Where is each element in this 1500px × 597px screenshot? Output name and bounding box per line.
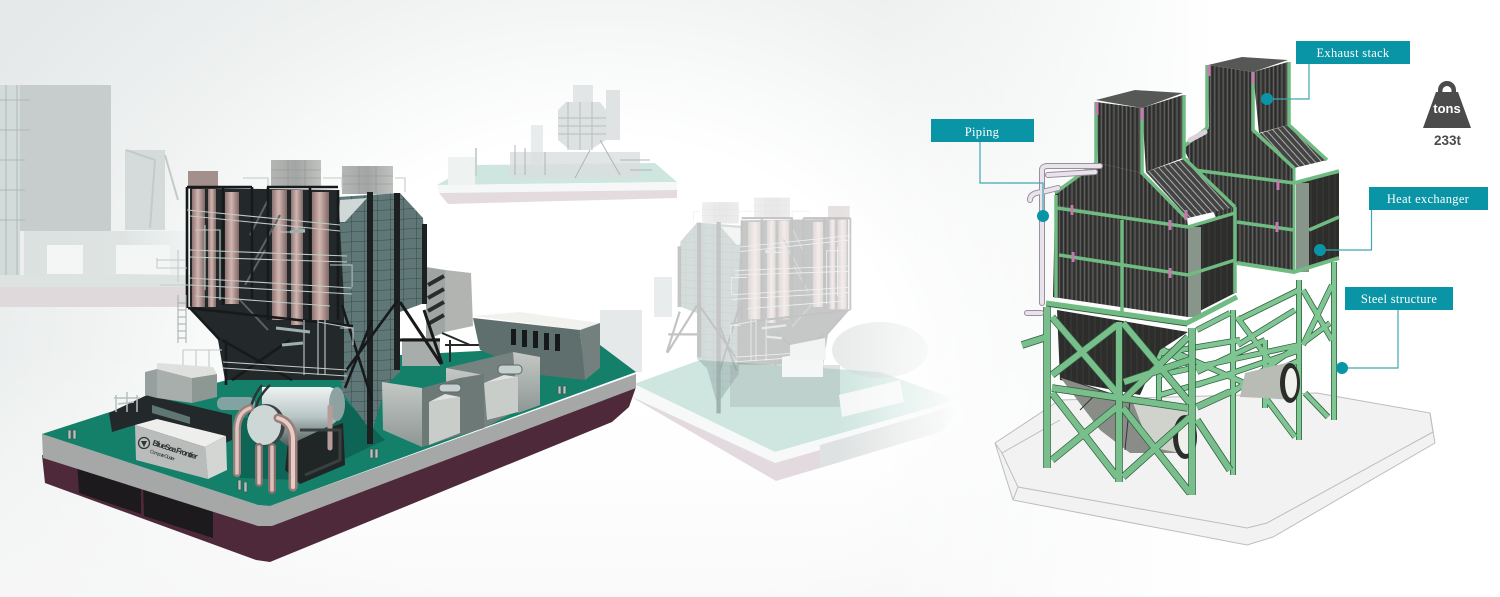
callout: exhaust stack: [1261, 41, 1410, 105]
door panels: [77, 461, 213, 538]
back legs: [1120, 262, 1334, 475]
icon: weight 233t: tons: [1433, 101, 1461, 116]
container brand text: BlueSea Frontier: [151, 438, 199, 461]
generator set: [109, 363, 255, 450]
deck house: [473, 312, 600, 380]
tower: [187, 160, 442, 444]
boiler drum with pipes: [237, 385, 345, 490]
faded plant: right: [600, 198, 958, 481]
piping: [1027, 132, 1205, 313]
acoustic enclosures: [382, 352, 540, 447]
hoppers: [1057, 310, 1300, 459]
ladder and side platform: [157, 250, 222, 372]
front module: [1046, 90, 1237, 326]
deck: [42, 345, 636, 506]
callout: heat exchanger: Heat exchanger: [1387, 192, 1470, 206]
back module: [1183, 57, 1339, 272]
icon: weight 233t: [1423, 81, 1471, 148]
container brand text: Compute Cluster: [149, 449, 176, 463]
icon: weight 233t: 233t: [1434, 133, 1462, 148]
deck bollards: [68, 386, 566, 492]
callout: exhaust stack: Exhaust stack: [1317, 46, 1390, 60]
callout: heat exchanger: [1314, 187, 1488, 256]
hull: [42, 387, 636, 562]
compute cluster container: [135, 419, 227, 479]
logo badge: [138, 438, 150, 448]
enclosure two: [446, 352, 540, 435]
main plant barge: [42, 160, 636, 562]
faded plant: upper left: [0, 85, 190, 307]
rear unit: [402, 267, 495, 366]
faded plant: upper centre: [437, 85, 677, 204]
callout: piping: [931, 119, 1049, 222]
side band: [42, 374, 636, 526]
callout: steel structure: Steel structure: [1361, 292, 1437, 306]
enclosure one: [382, 374, 484, 447]
callout: steel structure: [1336, 287, 1453, 374]
front legs: [1022, 307, 1230, 495]
right structure: steel module: [995, 57, 1435, 545]
base plate: [995, 393, 1435, 545]
callout: piping: Piping: [965, 125, 1000, 139]
